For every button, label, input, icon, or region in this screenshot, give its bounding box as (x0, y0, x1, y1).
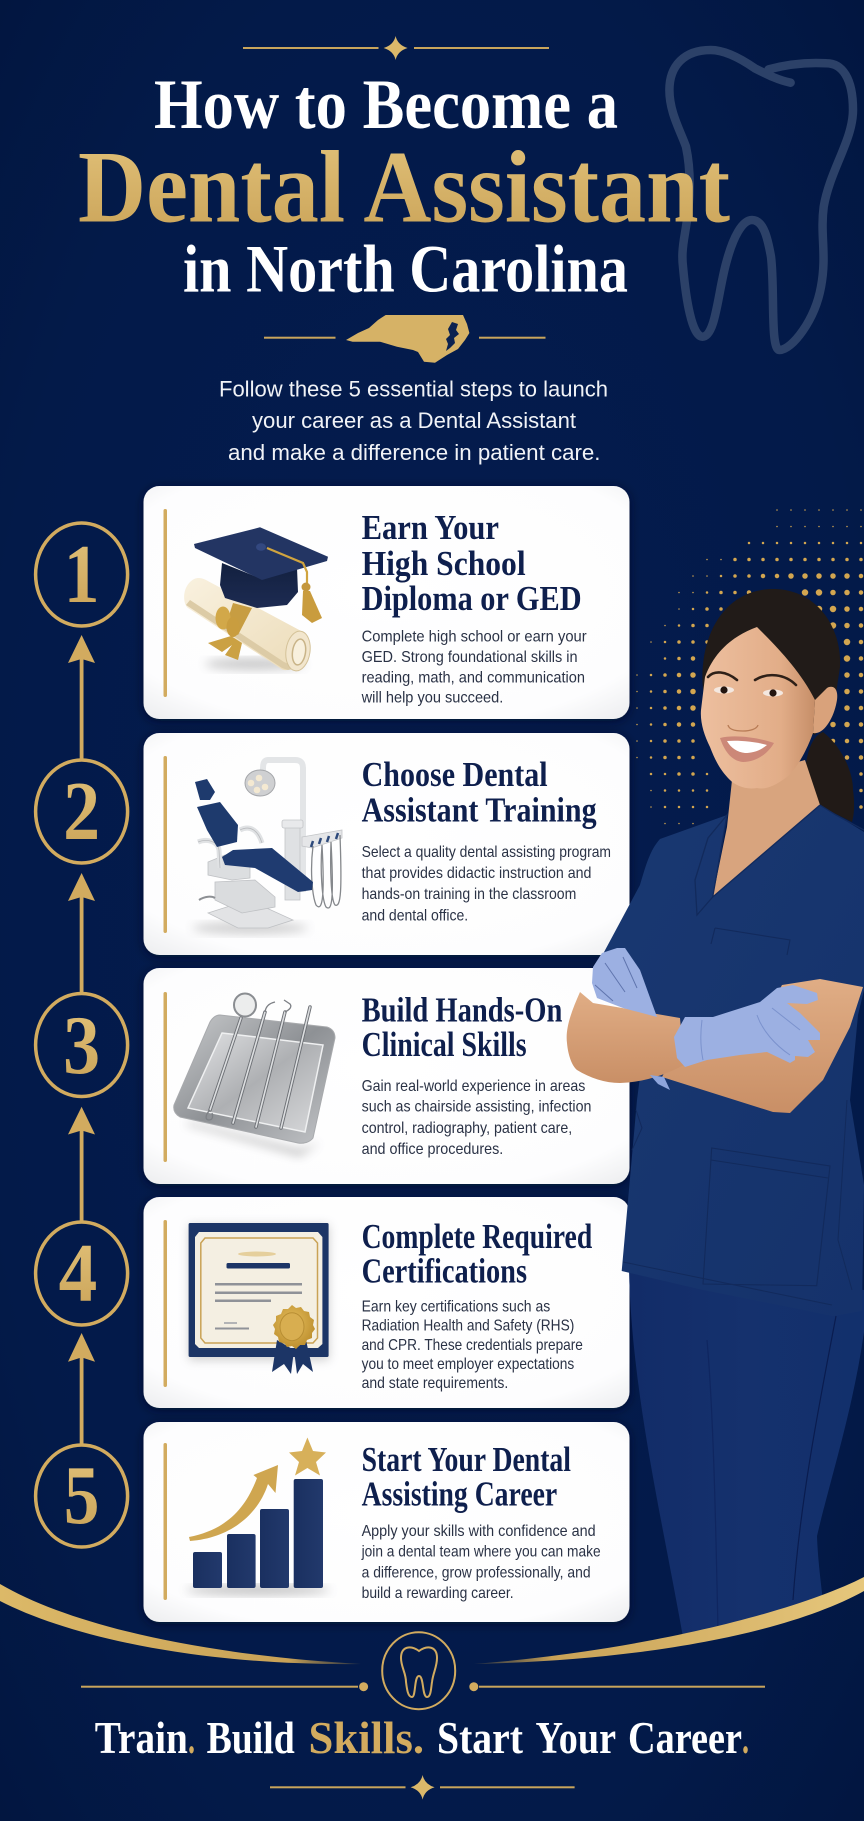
tagline: Train (95, 1713, 188, 1763)
title: in North Carolina (183, 231, 628, 307)
title: Dental Assistant (78, 131, 730, 245)
step 2 number: 2 (63, 765, 100, 858)
step 1 heading: Earn Your (362, 508, 499, 547)
step 2 description: and dental office. (362, 908, 468, 925)
step 3 description: and office procedures. (362, 1141, 503, 1158)
subtitle (219, 377, 608, 465)
icon: graduation cap and diploma (184, 527, 328, 672)
pants (629, 1270, 864, 1660)
step 5 description: build a rewarding career. (362, 1585, 514, 1602)
step 4 number (36, 1222, 128, 1325)
step 1 description: will help you succeed. (361, 690, 503, 707)
tagline: . (188, 1713, 195, 1763)
icon: instrument tray (174, 994, 335, 1156)
panel: step 4 (144, 1197, 630, 1408)
step 3 description (362, 1078, 591, 1158)
glove: resting hand (674, 985, 820, 1067)
step 1 heading: High School (362, 544, 526, 583)
icon: dental chair (192, 760, 342, 934)
right swoosh (474, 1577, 864, 1664)
step 3 heading (362, 991, 562, 1064)
tagline: Career (628, 1713, 742, 1763)
step 3 number (36, 994, 128, 1096)
arrow from 5 to 4 (68, 1333, 95, 1446)
panel: step 2 (144, 733, 630, 955)
glove: tucked hand (592, 948, 670, 1090)
tagline: Your (536, 1713, 616, 1763)
tagline: Start (437, 1713, 523, 1763)
subtitle: and make a difference in patient care. (228, 440, 600, 465)
step 2 heading: Assistant Training (362, 791, 597, 830)
step number timeline (36, 523, 128, 1547)
footer divider (81, 1682, 765, 1691)
icon: rising bar chart with star (186, 1438, 330, 1595)
step 2 description: Select a quality dental assisting program (362, 844, 611, 861)
step 4 heading: Certifications (362, 1252, 527, 1291)
arrow from 4 to 3 (68, 1107, 95, 1222)
step 3 number: 3 (63, 999, 100, 1092)
tooth emblem (382, 1632, 455, 1709)
step 5 description (361, 1523, 601, 1602)
step 5 number (36, 1445, 128, 1547)
step 1 number: 1 (64, 528, 99, 620)
step 5 description: Apply your skills with confidence and (362, 1523, 596, 1540)
title: How to Become a (154, 66, 618, 144)
title (78, 66, 730, 307)
step 1 number (36, 523, 128, 626)
step 1 description: GED. Strong foundational skills in (362, 649, 578, 666)
step 1 description (361, 629, 587, 707)
tagline: Build (207, 1713, 295, 1763)
head (701, 589, 840, 789)
step 2 heading: Choose Dental (362, 755, 548, 794)
panel: step 5 (144, 1422, 630, 1622)
tagline: Skills. (308, 1713, 424, 1763)
step 1 heading (362, 508, 582, 618)
step 5 description: a difference, grow professionally, and (362, 1565, 591, 1582)
step 3 heading: Build Hands-On (362, 991, 562, 1030)
step 3 description: Gain real-world experience in areas (362, 1078, 585, 1095)
step 2 heading (362, 755, 597, 830)
step 2 number (36, 760, 128, 863)
step 3 description: such as chairside assisting, infection (362, 1099, 591, 1116)
step 4 description (362, 1299, 583, 1392)
step 2 description: hands-on training in the classroom (362, 886, 576, 903)
icon: certificate with seal (189, 1223, 329, 1374)
dental assistant figure (567, 589, 864, 1660)
left swoosh (0, 1584, 361, 1664)
step 1 description: reading, math, and communication (362, 670, 585, 687)
step 5 heading: Assisting Career (362, 1475, 557, 1514)
panel: step 3 (144, 968, 630, 1184)
step 2 description: that provides didactic instruction and (362, 865, 591, 882)
subtitle: your career as a Dental Assistant (252, 408, 576, 433)
arrow from 2 to 1 (68, 635, 95, 760)
step 5 heading (362, 1440, 571, 1514)
step 1 description: Complete high school or earn your (362, 629, 587, 646)
step 4 description: Earn key certifications such as (362, 1299, 550, 1316)
step 5 heading: Start Your Dental (362, 1440, 571, 1479)
North Carolina map divider (264, 315, 546, 363)
step 4 heading: Complete Required (362, 1217, 593, 1256)
watermark tooth outline (669, 50, 853, 350)
step 5 description: join a dental team where you can make (361, 1544, 601, 1561)
ponytail (805, 732, 854, 822)
step 4 description: and CPR. These credentials prepare (362, 1337, 583, 1354)
step 5 number: 5 (64, 1449, 99, 1541)
step 4 description: and state requirements. (362, 1375, 508, 1392)
arrow from 3 to 2 (68, 873, 95, 994)
step 4 description: Radiation Health and Safety (RHS) (362, 1318, 574, 1335)
step 4 description: you to meet employer expectations (362, 1356, 574, 1373)
step 1 heading: Diploma or GED (362, 579, 582, 618)
panel: step 1 (144, 486, 630, 719)
crossed arms (567, 979, 863, 1113)
top ornament (243, 36, 549, 60)
scrub top (603, 805, 864, 1316)
step 4 number: 4 (59, 1227, 97, 1320)
subtitle: Follow these 5 essential steps to launch (219, 377, 608, 402)
step 3 description: control, radiography, patient care, (362, 1120, 572, 1137)
step 4 heading (362, 1217, 593, 1291)
halftone dots (637, 510, 861, 824)
tagline (95, 1713, 749, 1763)
step 2 description (362, 844, 611, 925)
step 3 heading: Clinical Skills (362, 1025, 527, 1064)
neck (713, 760, 820, 897)
tagline: . (742, 1713, 749, 1763)
bottom ornament (270, 1775, 575, 1800)
